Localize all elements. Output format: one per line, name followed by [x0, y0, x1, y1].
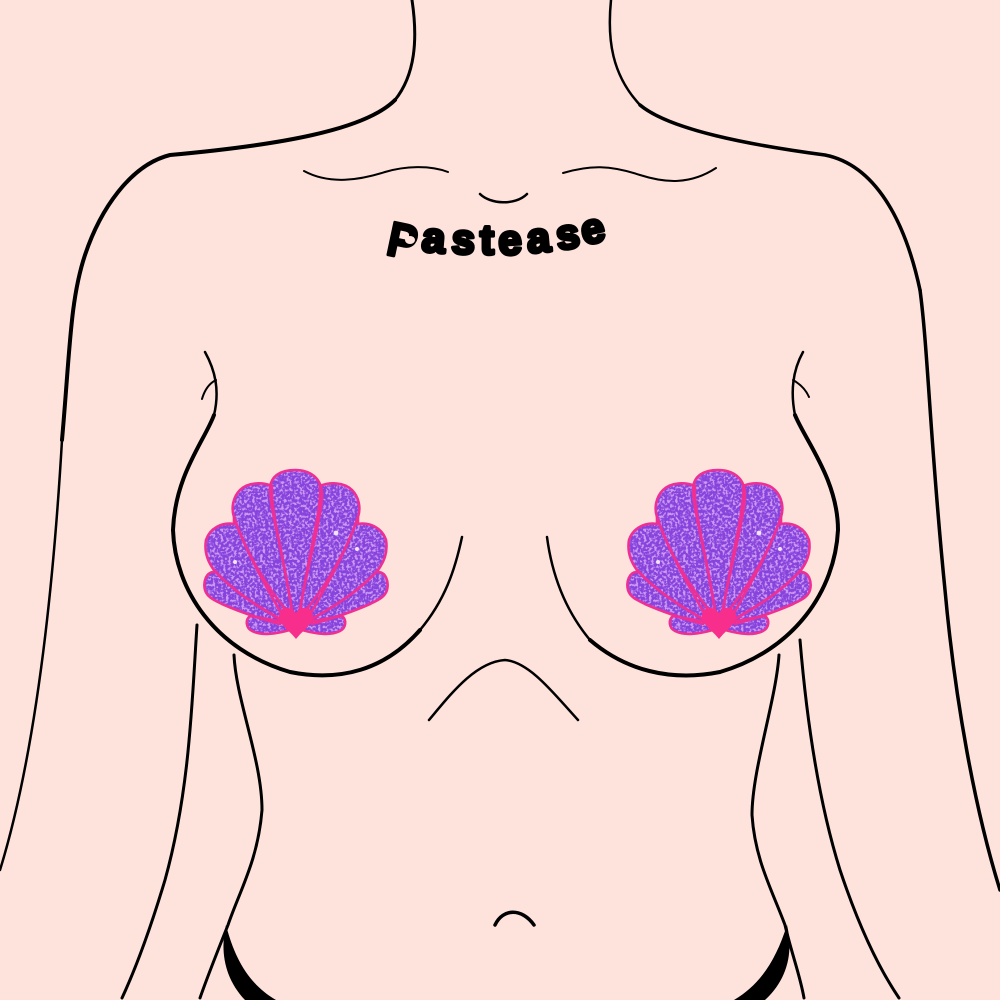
left shell pasty: [204, 470, 388, 639]
left inner arm line: [122, 625, 197, 998]
sternal notch: [480, 194, 527, 202]
left collarbone: [304, 167, 448, 180]
left underarm crease: [202, 380, 216, 399]
right underarm crease: [793, 380, 809, 397]
navel: [495, 912, 534, 925]
right neck line: [610, 0, 640, 105]
underwear right edge: [734, 925, 789, 1000]
right breast upper contour: [793, 352, 803, 415]
left breast lower contour: [173, 415, 420, 675]
ribcage arch: [429, 660, 578, 720]
underwear left edge: [223, 925, 276, 1000]
right shell pasty: [627, 470, 811, 639]
sparkles: [233, 531, 359, 564]
left waist line: [200, 655, 262, 998]
left shoulder line: [62, 100, 395, 440]
right breast lower contour: [590, 415, 838, 675]
logo: Pastease: astease: [420, 203, 609, 264]
logo initial P: P: [383, 212, 422, 270]
right shoulder line: [640, 105, 920, 290]
left outer arm line: [0, 440, 62, 870]
left neck line: [395, 0, 415, 100]
shell heart base: [279, 608, 313, 639]
right waist line: [752, 655, 804, 998]
right outer arm line: [920, 290, 1000, 890]
right collarbone: [563, 167, 716, 181]
right inner arm line: [800, 640, 899, 998]
left breast upper contour: [205, 352, 217, 415]
logo notch in P: [405, 236, 415, 244]
right breast inner contour: [547, 537, 590, 640]
left breast inner contour: [420, 537, 462, 630]
